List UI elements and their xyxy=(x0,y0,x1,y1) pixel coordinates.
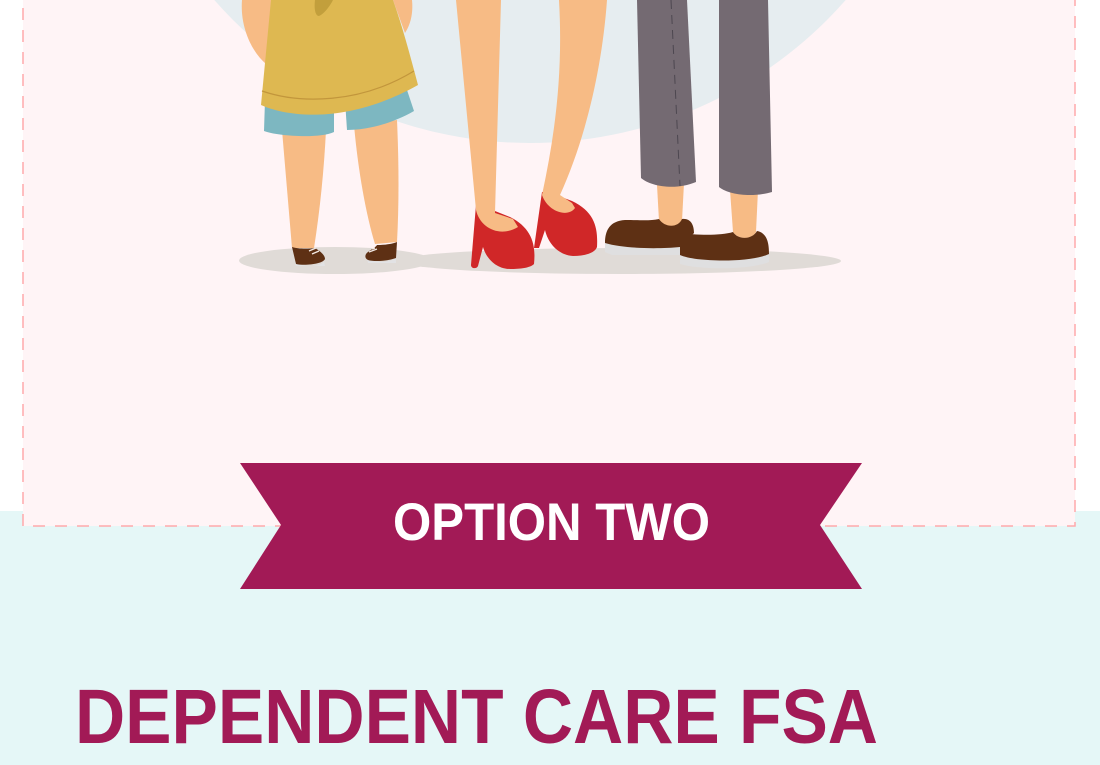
man shoe soles xyxy=(605,243,769,268)
child arms xyxy=(242,0,412,64)
hair tip xyxy=(315,0,333,16)
panel: dashed family panel xyxy=(23,0,1075,526)
teal lower section background xyxy=(0,511,1100,765)
backdrop circle xyxy=(110,0,950,143)
child shorts xyxy=(264,90,414,136)
man ankles xyxy=(657,183,758,238)
woman red shoes xyxy=(471,192,597,269)
dress hem stitch xyxy=(262,71,414,99)
banner ribbon: option two xyxy=(240,463,862,589)
child shoes xyxy=(292,242,397,266)
trouser stitching xyxy=(671,0,680,186)
man trousers xyxy=(637,0,772,195)
heading: dependent care fsa: DEPENDENT CARE FSA xyxy=(75,674,878,760)
child dress xyxy=(261,0,418,115)
ground shadows xyxy=(239,247,841,274)
child legs xyxy=(282,120,398,248)
illustration: man xyxy=(605,0,772,268)
illustration: woman xyxy=(456,0,607,269)
man brown shoes xyxy=(605,219,769,260)
illustration: child xyxy=(242,0,418,266)
banner label: OPTION TWO xyxy=(393,493,710,552)
woman legs xyxy=(456,0,607,232)
